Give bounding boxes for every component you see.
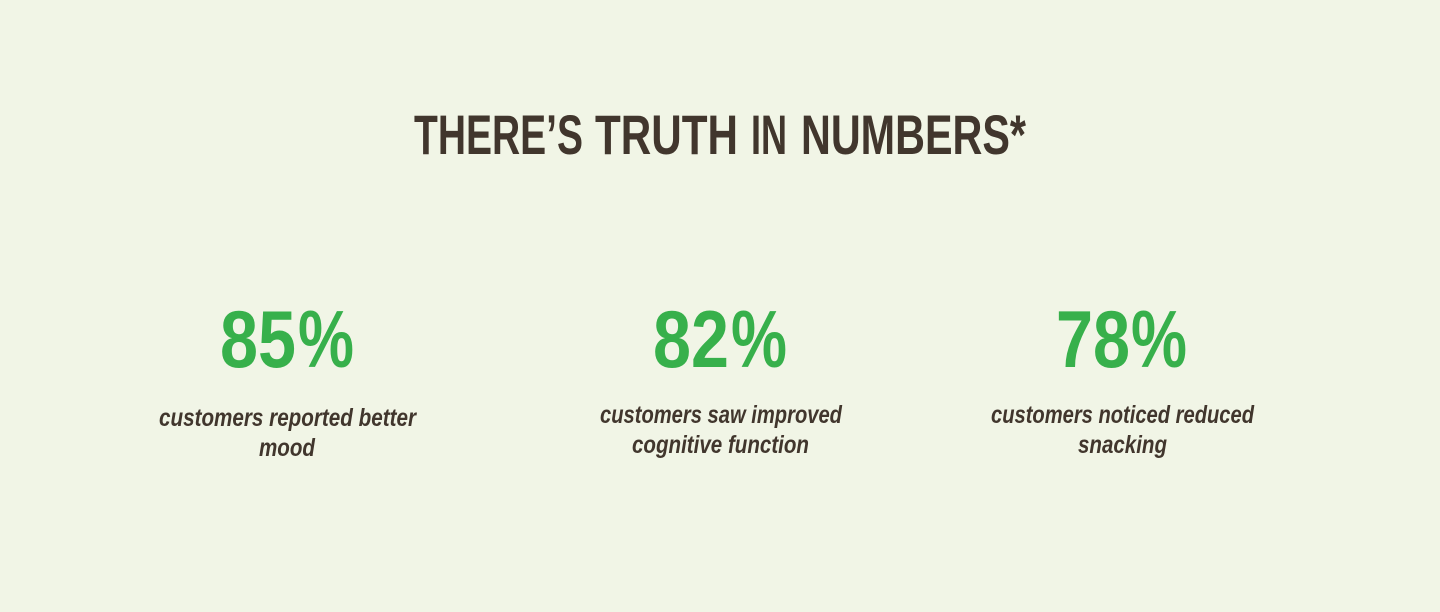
- number: 82%: 82: [653, 295, 729, 385]
- caption: better mood: customers reported better: [159, 404, 417, 432]
- number: 78%: 78: [1056, 295, 1130, 385]
- stat: 82% cognitive function: [600, 295, 843, 459]
- number: 85%: %: [298, 295, 354, 385]
- number: 85%: 85: [220, 295, 296, 385]
- caption: reduced snacking: [991, 401, 1255, 459]
- stat: 85% better mood: [159, 295, 417, 462]
- title: THERE’S: [414, 103, 583, 166]
- caption: cognitive function: customers saw improved: [600, 401, 843, 429]
- title: IN: [751, 103, 787, 166]
- stat: 78% reduced snacking: [991, 295, 1255, 459]
- caption: cognitive function: [600, 401, 843, 459]
- caption: reduced snacking: customers noticed reduced: [991, 401, 1255, 429]
- caption: better mood: [159, 404, 417, 462]
- number: 82%: %: [731, 295, 787, 385]
- caption: cognitive function: cognitive function: [632, 431, 809, 459]
- caption: reduced snacking: snacking: [1078, 431, 1167, 459]
- title: NUMBERS*: [801, 103, 1026, 166]
- number: 78%: %: [1131, 295, 1187, 385]
- caption: better mood: mood: [259, 434, 316, 462]
- title: TRUTH: [595, 103, 738, 166]
